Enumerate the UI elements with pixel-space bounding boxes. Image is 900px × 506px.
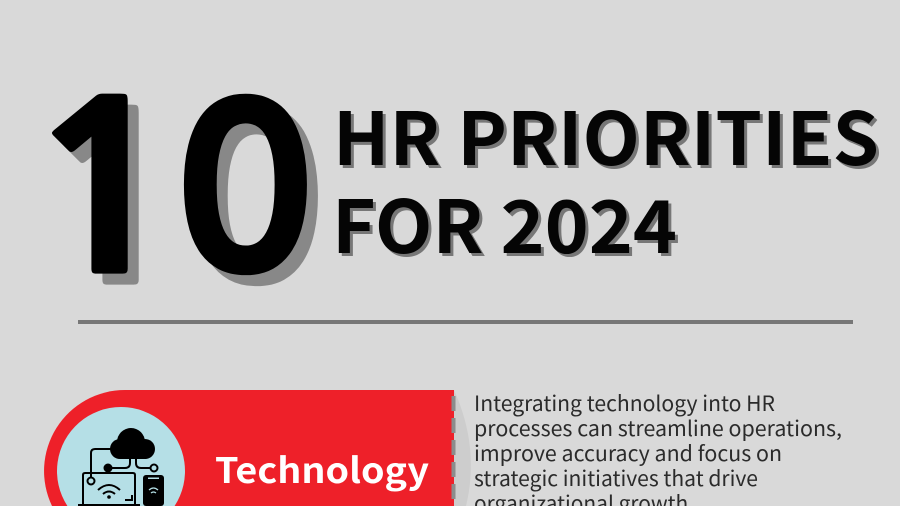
description text: improve accuracy and focus on: [474, 438, 782, 468]
description text: Integrating technology into HR: [474, 388, 775, 418]
label: technology: Technology: [215, 443, 429, 494]
title: HR PRIORITIES: [336, 84, 882, 190]
icon: cloud, laptop and phone: [78, 428, 164, 506]
big number 10: 1: [24, 74, 184, 307]
description text: strategic initiatives that drive: [474, 463, 758, 493]
big number 10: 0: [170, 77, 315, 305]
title: FOR 2024: [332, 169, 677, 275]
title: [332, 81, 882, 278]
description text: processes can streamline operations,: [474, 413, 842, 443]
icon circle: [57, 407, 185, 506]
title: HR PRIORITIES: [333, 81, 879, 187]
title: FOR 2024: [335, 172, 680, 278]
big number 10: 0: [181, 88, 326, 316]
big number 10: 1: [35, 85, 195, 318]
description text: [474, 388, 842, 506]
panel: technology: [44, 388, 842, 506]
red banner: [44, 390, 454, 506]
big number 10: [24, 74, 326, 318]
